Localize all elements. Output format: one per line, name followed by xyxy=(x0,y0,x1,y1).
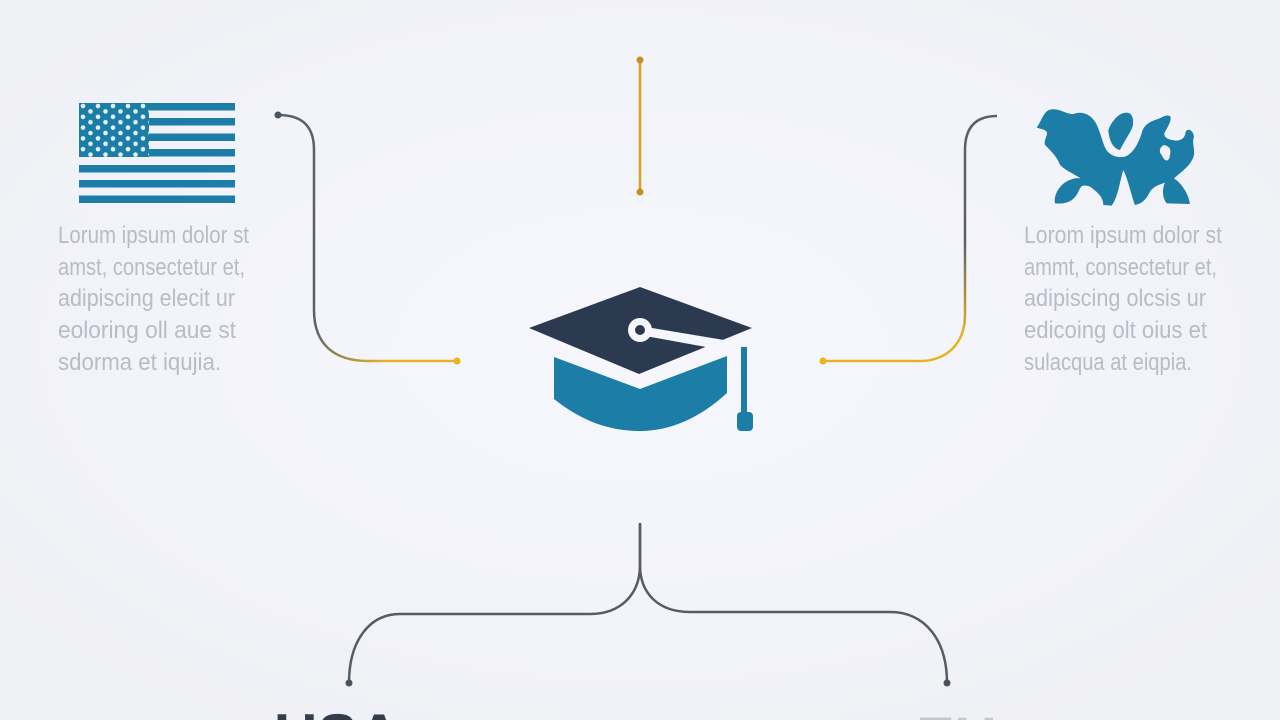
text block: left description: sdorma et iqujia. xyxy=(58,349,221,376)
text block: left description: eoloring oll aue st xyxy=(58,317,236,344)
connector: right curve xyxy=(820,116,997,364)
text block: left description: amst, consectetur et, xyxy=(58,254,245,281)
text block: right description: Lorom ipsum dolor st xyxy=(1024,222,1222,249)
text block: left description: Lorum ipsum dolor st xyxy=(58,222,249,249)
icon: graduation cap xyxy=(529,287,753,431)
text block: left description: adipiscing elecit ur xyxy=(58,285,235,312)
icon: world map xyxy=(1037,109,1194,206)
connector: top vertical line xyxy=(636,56,644,196)
text block: right description xyxy=(1024,222,1222,376)
connector: left curve xyxy=(274,112,460,364)
text block: right description: adipiscing olcsis ur xyxy=(1024,285,1206,312)
text block: right description: sulacqua at eiqpia. xyxy=(1024,349,1192,376)
text block: right description: edicoing olt oius et xyxy=(1024,317,1207,344)
text block: right description: ammt, consectetur et, xyxy=(1024,254,1217,281)
connector: bottom bracket xyxy=(346,523,950,686)
text block: left description xyxy=(58,222,249,376)
icon: USA flag xyxy=(79,103,235,203)
